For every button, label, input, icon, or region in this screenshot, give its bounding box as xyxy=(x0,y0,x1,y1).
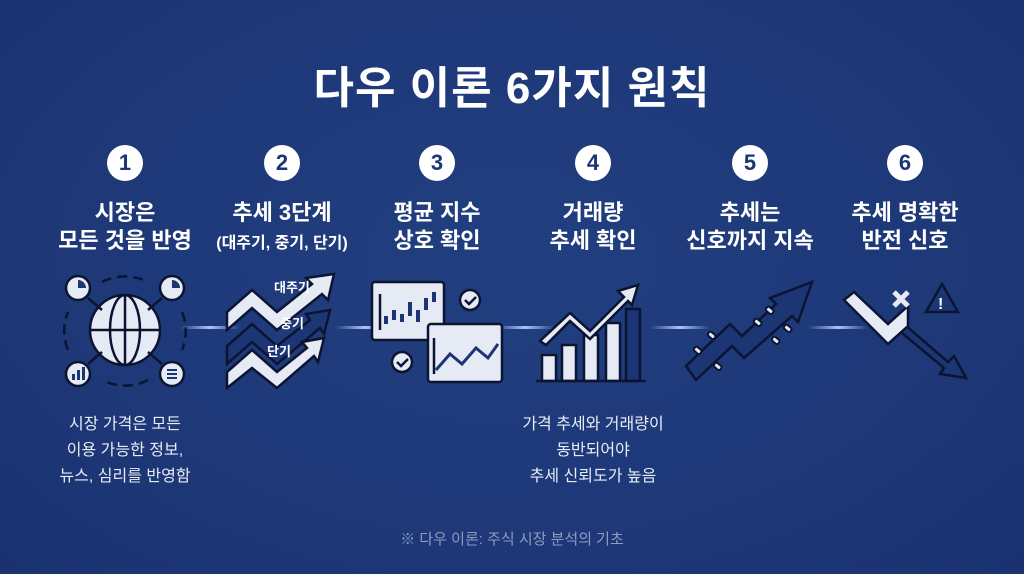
column 2 heading xyxy=(216,145,348,252)
footer note: ※ 다우 이론: 주식 시장 분석의 기초 xyxy=(400,531,624,548)
column 4 heading: 4 xyxy=(587,150,599,175)
icon: reversal arrow with warning: ! xyxy=(938,296,943,313)
icon: globe with data xyxy=(63,274,187,388)
icon: reversal arrow with warning xyxy=(842,282,968,380)
column 6 heading: 추세 명확한 xyxy=(851,200,959,225)
column 3 heading: 3 xyxy=(431,150,443,175)
description: column 4: 추세 신뢰도가 높음 xyxy=(530,468,656,485)
column 6 heading: 반전 신호 xyxy=(861,228,949,253)
icon: upward trend arrow xyxy=(684,280,814,382)
description: column 1: 시장 가격은 모든 xyxy=(69,416,181,433)
description: column 4: 가격 추세와 거래량이 xyxy=(522,416,664,433)
icon: three trend arrows xyxy=(226,272,336,390)
column 1 heading: 모든 것을 반영 xyxy=(58,228,192,253)
icon: volume bars with arrow xyxy=(536,283,646,382)
icon: three trend arrows: 단기 xyxy=(267,344,291,359)
column 1 heading xyxy=(58,145,192,253)
icon: two chart windows with checks xyxy=(370,280,504,384)
column 2 heading: 2 xyxy=(276,150,288,175)
column 1 heading: 시장은 xyxy=(95,200,155,225)
column 4 heading: 거래량 xyxy=(563,200,623,225)
column 6 heading: 6 xyxy=(899,150,911,175)
icon: three trend arrows: 중기 xyxy=(280,316,304,331)
column 3 heading: 평균 지수 xyxy=(393,200,481,225)
column 5 heading: 추세는 xyxy=(720,200,780,225)
description: column 4: 동반되어야 xyxy=(556,442,630,459)
column 6 heading xyxy=(851,145,959,253)
column 3 heading: 상호 확인 xyxy=(393,228,481,253)
column 1 heading: 1 xyxy=(119,150,131,175)
column 5 heading: 신호까지 지속 xyxy=(686,228,814,253)
description: column 1 xyxy=(59,416,191,485)
column 5 heading xyxy=(686,145,814,253)
column 4 heading: 추세 확인 xyxy=(549,228,637,253)
description: column 1: 뉴스, 심리를 반영함 xyxy=(59,468,191,485)
column 4 heading xyxy=(549,145,637,253)
column 2 heading: (대주기, 중기, 단기) xyxy=(216,235,348,252)
icon: three trend arrows: 대주기 xyxy=(274,280,310,295)
description: column 1: 이용 가능한 정보, xyxy=(67,442,183,459)
title: 다우 이론 6가지 원칙 xyxy=(314,64,710,113)
column 3 heading xyxy=(393,145,481,253)
column 5 heading: 5 xyxy=(744,150,756,175)
description: column 4 xyxy=(522,416,664,485)
column 2 heading: 추세 3단계 xyxy=(232,200,332,225)
